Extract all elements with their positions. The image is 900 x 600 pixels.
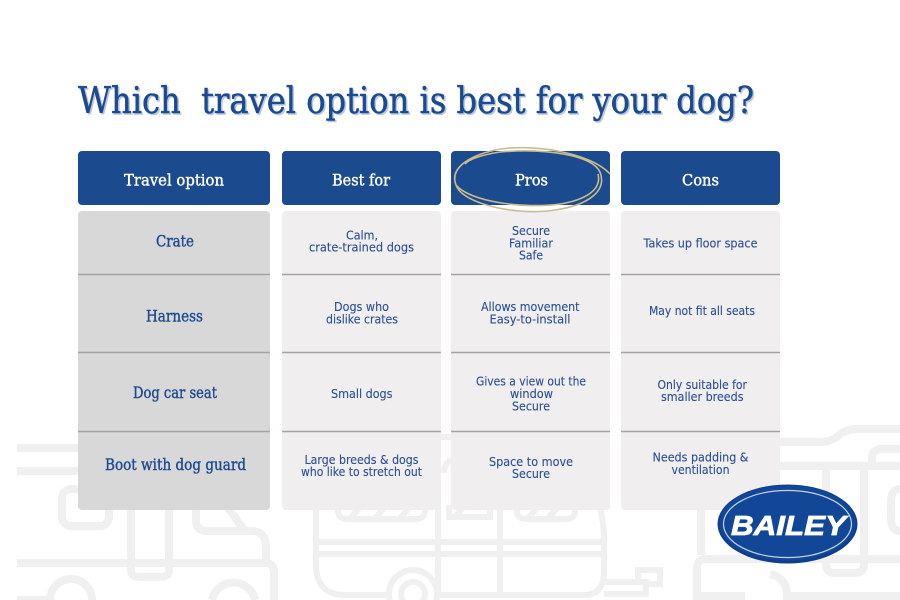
cell: Gives a view: Secure <box>512 400 550 414</box>
cell: Dogs who dislike crates: Dogs who <box>334 300 389 314</box>
cell: Needs padding <box>652 450 748 477</box>
cell: Secure Familiar Safe: Secure <box>512 224 550 238</box>
cell: Calm, crate-trained dogs <box>309 228 414 254</box>
header: Best for <box>282 151 441 205</box>
row label: Crate: Crate <box>156 232 194 250</box>
hand-drawn circle around Pros <box>455 148 610 212</box>
cell: Needs padding: Needs padding & <box>652 450 748 464</box>
cell: Needs padding: ventilation <box>672 463 730 477</box>
cell: Large breeds <box>301 453 422 479</box>
header: Travel option <box>78 151 270 205</box>
cell: Large breeds: who like to stretch out <box>301 465 422 479</box>
column: best for <box>282 211 441 510</box>
cell: Secure Familiar Safe <box>509 224 553 262</box>
background: vehicle line art <box>17 429 900 600</box>
cell: Large breeds: Large breeds & dogs <box>304 453 418 467</box>
header: Cons: Cons <box>682 170 719 190</box>
cell: Gives a view <box>476 374 586 414</box>
cell: May not fit all seats: May not fit all seats <box>649 304 755 318</box>
cell: Calm, crate-trained dogs: crate-trained dogs <box>309 240 414 254</box>
cell: Only suitable: Only suitable for <box>658 378 747 392</box>
header: Pros <box>451 151 610 205</box>
cell: Dogs who dislike crates <box>326 300 398 326</box>
header: Travel option: Travel option <box>124 170 224 190</box>
cell: Only suitable <box>658 378 747 404</box>
cell: Allows movement: Easy-to-install <box>490 312 570 326</box>
cell: Space to move: Secure <box>512 467 550 481</box>
motorhome outline <box>697 429 900 600</box>
header: Pros: Pros <box>515 170 548 190</box>
cell: Secure Familiar Safe: Safe <box>519 248 543 262</box>
title: Which travel option is best for your dog? <box>80 82 756 124</box>
column: pros <box>451 211 610 510</box>
row label: Harness: Harness <box>146 308 203 326</box>
caravan outline <box>316 437 660 600</box>
cell: Gives a view: window <box>510 387 553 401</box>
cell: Calm, crate-trained dogs: Calm, <box>346 228 378 242</box>
cell: Allows movement <box>481 300 580 326</box>
cell: Only suitable: smaller breeds <box>661 390 744 404</box>
cell: Secure Familiar Safe: Familiar <box>509 236 553 250</box>
column: cons <box>621 211 780 510</box>
Bailey logo <box>718 484 858 564</box>
cell: Dogs who dislike crates: dislike crates <box>326 312 398 326</box>
cell: Small dogs: Small dogs <box>331 387 392 401</box>
truck outline <box>17 448 274 600</box>
row label: Boot with dog guard: Boot with dog guard <box>105 456 246 474</box>
cell: Allows movement: Allows movement <box>481 300 580 314</box>
header: Best for: Best for <box>332 170 390 190</box>
row label: Dog car seat: Dog car seat <box>133 384 218 402</box>
cell: Space to move <box>489 455 573 481</box>
cell: Gives a view: Gives a view out the <box>476 374 586 388</box>
Bailey logo: BAILEY <box>731 510 849 541</box>
cell: Space to move: Space to move <box>489 455 573 469</box>
title: Which travel option is best for your dog? <box>78 81 754 122</box>
cell: Takes up floor space: Takes up floor space <box>643 236 758 250</box>
header: Cons <box>621 151 780 205</box>
column: travel options <box>78 211 270 510</box>
